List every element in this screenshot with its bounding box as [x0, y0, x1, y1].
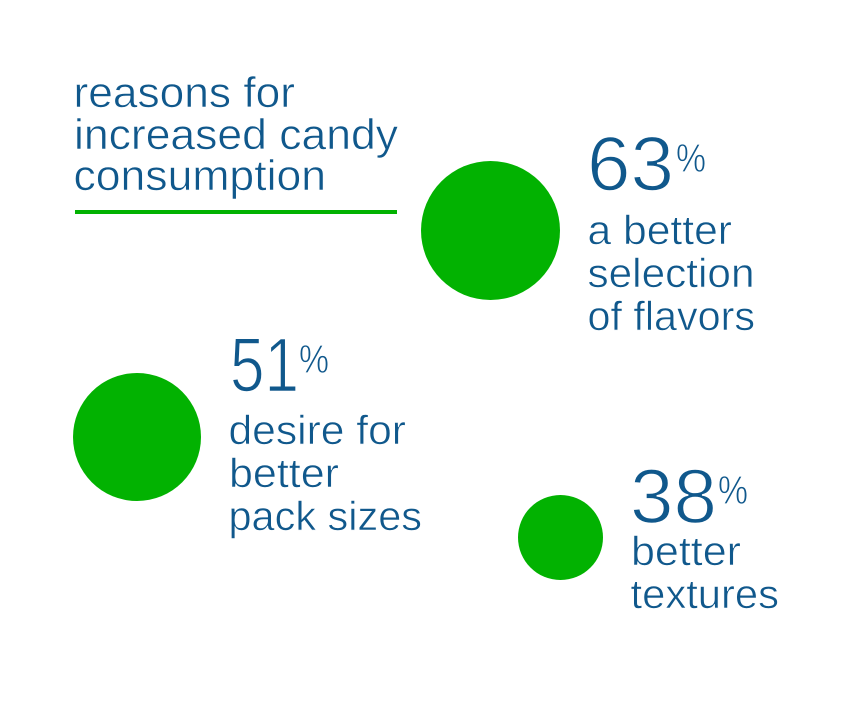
- number: 63%: %: [676, 137, 706, 181]
- label: desire for better pack sizes: [228, 407, 422, 539]
- circle: 51%: [73, 373, 201, 501]
- label: a better selection of flavors: [588, 207, 755, 339]
- label: a better selection of flavors: of flavors: [588, 293, 755, 339]
- title: reasons for: [74, 69, 295, 117]
- circle: 63%: [421, 161, 560, 300]
- label: better textures: textures: [630, 571, 779, 617]
- stat: 51% desire for better pack sizes: [228, 322, 422, 539]
- label: better textures: [630, 528, 779, 617]
- label: a better selection of flavors: selection: [588, 250, 754, 296]
- label: desire for better pack sizes: desire for: [228, 407, 406, 453]
- circle: 38%: [518, 495, 603, 580]
- stat: 38% better textures: [630, 454, 779, 617]
- stat: 63% a better selection of flavors: [587, 122, 755, 339]
- number: 38%: %: [718, 469, 748, 513]
- title underline: [75, 210, 397, 214]
- number: 38%: 38: [630, 454, 717, 540]
- title: [74, 69, 399, 200]
- label: a better selection of flavors: a better: [588, 207, 732, 253]
- label: desire for better pack sizes: pack sizes: [228, 493, 422, 539]
- number: 51%: %: [299, 338, 329, 382]
- title: increased candy: [74, 111, 399, 159]
- label: desire for better pack sizes: better: [229, 450, 339, 496]
- number: 51%: 51: [230, 322, 299, 408]
- label: better textures: better: [631, 528, 741, 574]
- number: 63%: 63: [587, 122, 674, 208]
- title: consumption: [74, 152, 326, 200]
